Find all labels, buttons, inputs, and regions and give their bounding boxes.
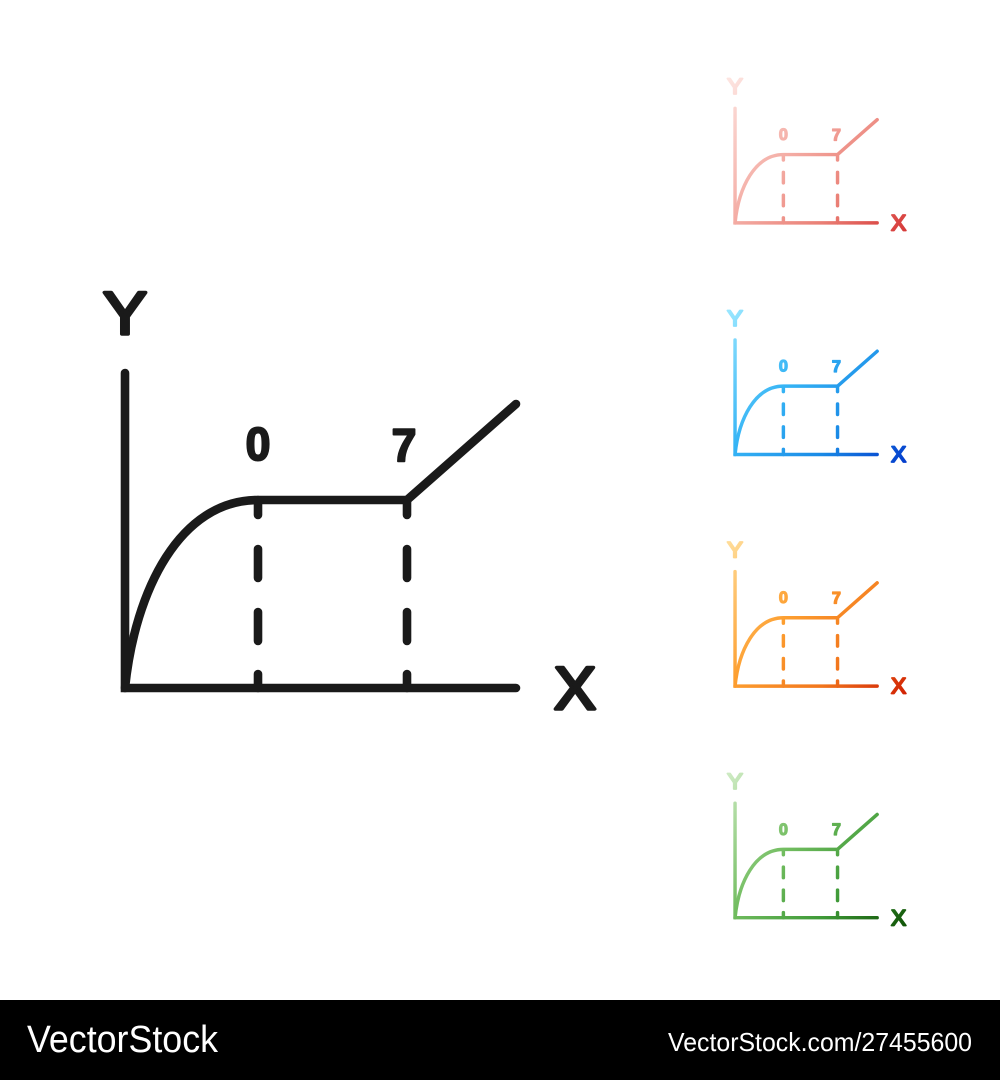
orange curve and guides	[735, 583, 877, 686]
dashed guide at 0	[254, 500, 262, 688]
orange tick 0: 0	[779, 589, 788, 607]
red axes	[735, 108, 877, 223]
green X label: X	[891, 906, 906, 930]
axes	[125, 373, 516, 688]
small orange graph icon	[727, 537, 906, 699]
curve and trend line	[125, 404, 516, 688]
tick label 7: 7	[392, 419, 416, 471]
red tick 7: 7	[832, 126, 841, 144]
red Y label: Y	[727, 74, 743, 99]
small red graph icon	[727, 74, 906, 235]
orange axes	[735, 572, 877, 686]
footer image id: VectorStock.com/27455600	[668, 1027, 972, 1057]
footer brand: VectorStock	[27, 1019, 219, 1061]
orange X label: X	[891, 674, 906, 699]
footer bar	[0, 1000, 1000, 1080]
red tick 0: 0	[779, 126, 788, 144]
orange tick 7: 7	[832, 589, 841, 608]
red X label: X	[891, 211, 906, 235]
blue tick 7: 7	[832, 358, 841, 376]
blue curve and guides	[735, 351, 877, 454]
blue tick 0: 0	[779, 357, 788, 376]
blue Y label: Y	[727, 306, 743, 331]
small blue graph icon	[727, 306, 906, 467]
blue X label: X	[891, 443, 906, 467]
green curve and guides	[735, 814, 877, 918]
small green graph icon	[727, 769, 906, 930]
X axis label: X	[554, 655, 596, 723]
green tick 0: 0	[779, 821, 788, 839]
Y axis label: Y	[103, 281, 147, 347]
green Y label: Y	[727, 769, 743, 794]
blue axes	[735, 340, 877, 454]
tick label 0: 0	[246, 418, 270, 470]
main black graph icon	[103, 281, 596, 723]
orange Y label: Y	[727, 537, 743, 562]
green axes	[735, 803, 877, 918]
dashed guide at 7	[403, 500, 411, 688]
green tick 7: 7	[832, 821, 841, 839]
red curve and guides	[735, 120, 877, 223]
